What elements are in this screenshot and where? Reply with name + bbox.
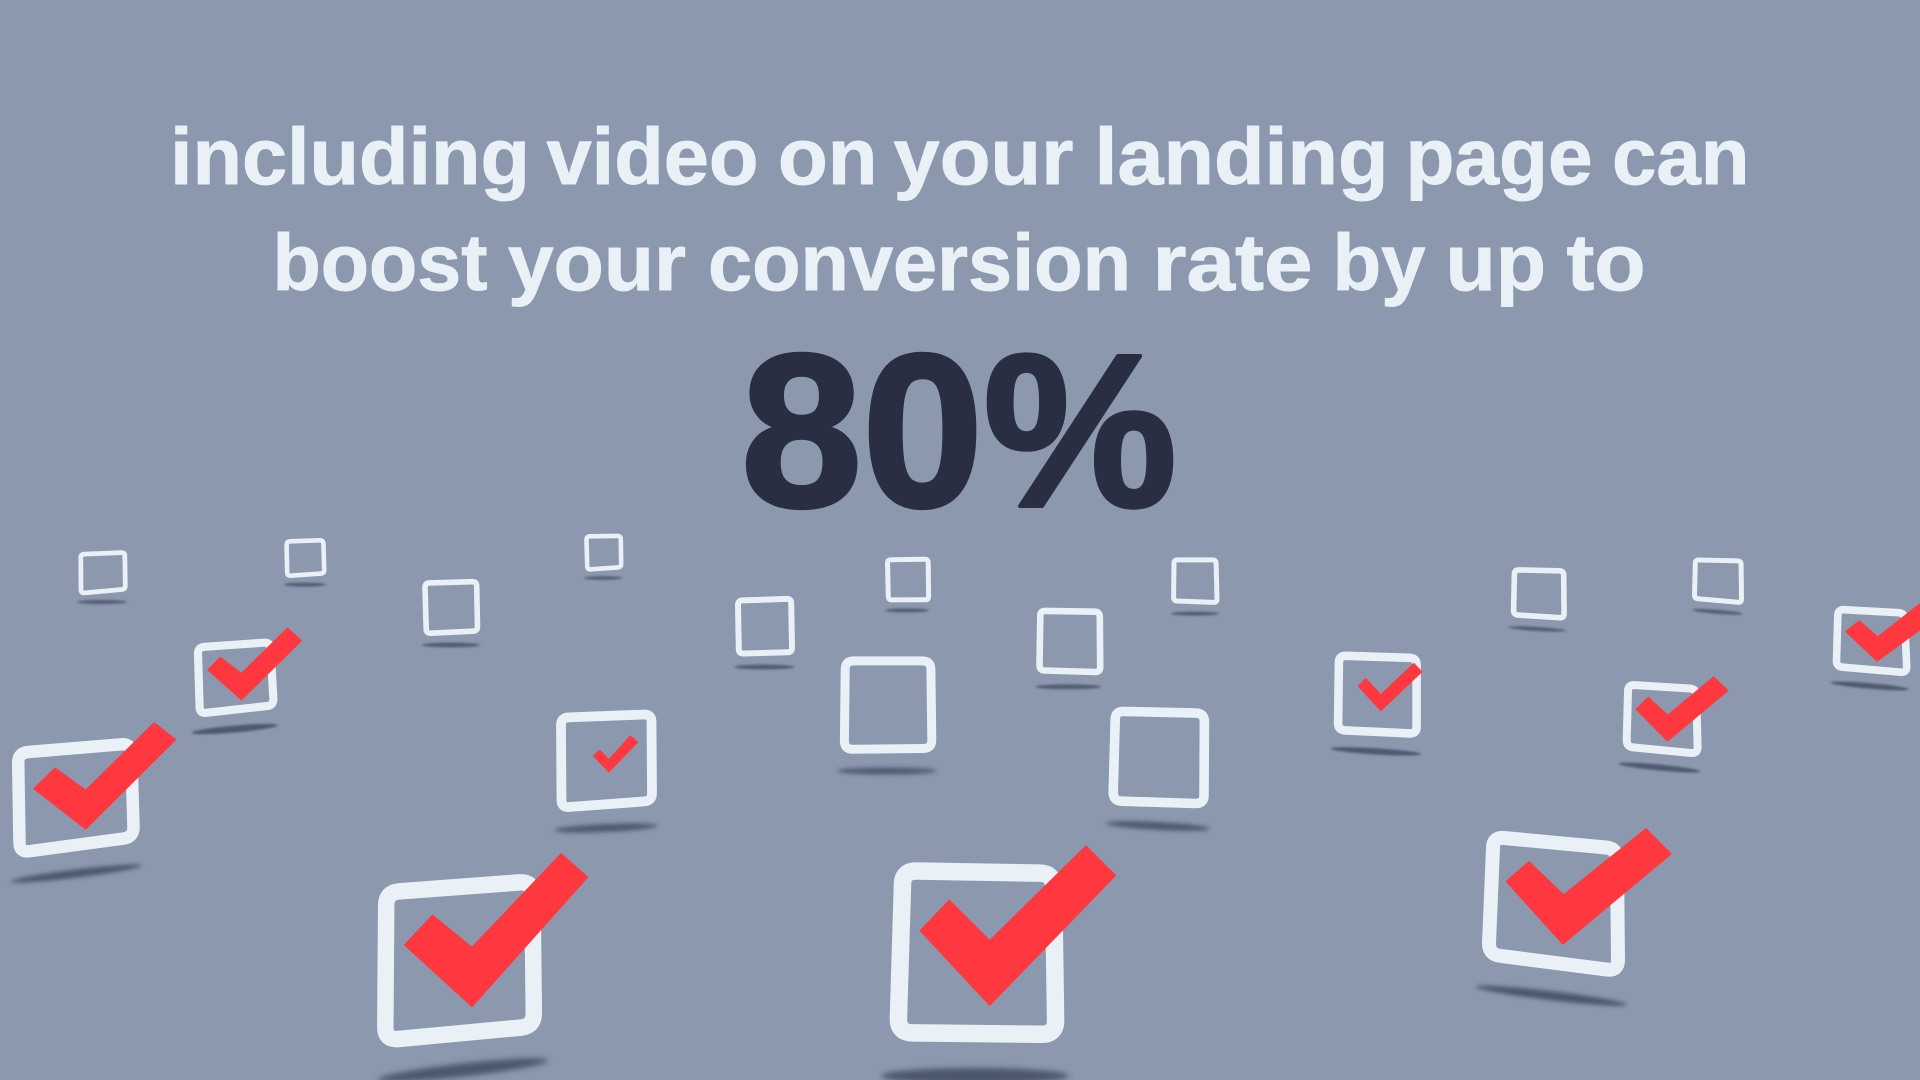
checkbox: empty, middle 1 [734, 599, 794, 670]
heading line 1: video [546, 112, 758, 201]
heading line 2: to [1566, 218, 1646, 307]
checkbox: checked, large bottom left [377, 854, 588, 1080]
checkbox: checked, right middle [1331, 656, 1422, 757]
heading line 2: by [1332, 218, 1426, 307]
checkbox: checked, large bottom centre [881, 846, 1115, 1080]
heading line 1 [170, 112, 1750, 201]
checkbox: checked, cut off at right edge [1831, 600, 1920, 692]
heading line 2: up [1446, 218, 1546, 307]
checkbox: checked, large bottom right [1475, 829, 1671, 1009]
heading line 1: your [894, 112, 1074, 201]
heading [170, 112, 1750, 307]
checkbox: empty, top row 5 [885, 559, 929, 612]
checkbox: empty, top row 3 [422, 582, 480, 648]
checkbox: empty, top row 7 [1508, 570, 1566, 633]
checkbox: empty, top row 1 [77, 553, 127, 604]
checkbox: empty, large centre left [837, 661, 937, 774]
checkbox field [10, 536, 1920, 1080]
checkbox: empty, middle 2 [1035, 611, 1101, 689]
checkbox: empty, top row 6 [1171, 560, 1219, 616]
big statistic: 80%: 80% [741, 310, 1177, 553]
heading line 1: on [778, 112, 878, 201]
heading line 2: rate [1152, 218, 1312, 307]
heading line 1: landing [1094, 112, 1388, 201]
heading line 2: conversion [708, 218, 1131, 307]
checkbox: checked, right [1618, 677, 1728, 774]
heading line 2 [272, 218, 1646, 307]
heading line 1: page [1406, 112, 1592, 201]
checkbox: checked with tiny mark [554, 714, 658, 834]
checkbox: empty, large centre right [1106, 711, 1210, 833]
checkbox: empty, top row 4 [584, 536, 622, 580]
heading line 1: including [170, 112, 530, 201]
checkbox: empty, top row 2 [284, 540, 326, 587]
checkbox: checked, far left [10, 723, 175, 886]
checkbox: checked, upper left [191, 628, 301, 736]
heading line 2: your [508, 218, 686, 307]
heading line 1: can [1612, 112, 1750, 201]
heading line 2: boost [272, 218, 488, 307]
checkbox: empty, top row 8 [1692, 560, 1742, 616]
